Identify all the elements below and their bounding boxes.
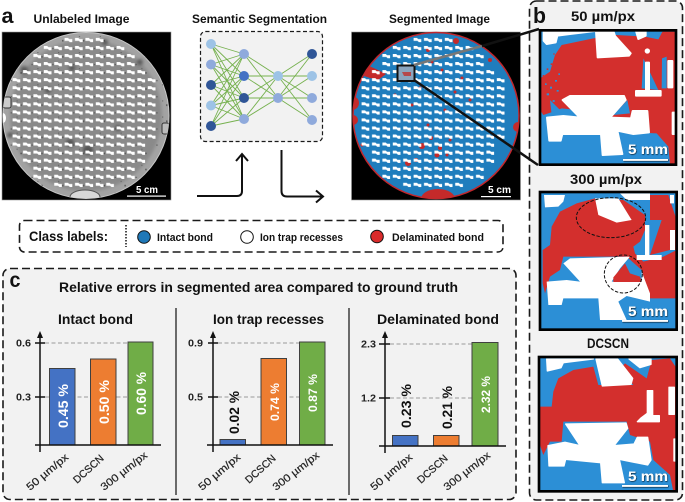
segmented wafer image xyxy=(345,32,523,209)
dashed circles of interest xyxy=(576,198,646,293)
panel b background xyxy=(530,1,682,500)
chart: ion trap recesses: 0.9 xyxy=(188,338,203,350)
bars xyxy=(392,342,498,446)
chart heading: Delaminated bond xyxy=(377,312,499,327)
chart: delaminated bond: 50 µm/px xyxy=(368,451,416,493)
image crop: DCSCN xyxy=(539,357,677,492)
scale bar: 50 um/px 5 mm xyxy=(623,142,668,161)
arrow: out of network xyxy=(282,150,323,202)
legend: intact bond xyxy=(138,231,213,244)
chart: ion trap recesses: DCSCN xyxy=(243,453,279,486)
panel label b: b xyxy=(533,3,546,28)
chart: delaminated bond: 0.23 % xyxy=(398,383,414,428)
chart: intact bond xyxy=(16,312,161,493)
heading: Semantic Segmentation: Semantic Segmentation xyxy=(192,12,327,26)
chart heading: Ion trap recesses xyxy=(213,312,324,327)
legend: delaminated bond xyxy=(371,230,484,244)
bars xyxy=(220,342,325,445)
scale bar: 300 um/px 5 mm: 5 mm xyxy=(628,304,668,319)
legend: intact bond: Intact bond xyxy=(157,232,213,244)
legend: delaminated bond: Delaminated bond xyxy=(392,232,484,244)
chart: ion trap recesses xyxy=(188,312,333,493)
chart: delaminated bond xyxy=(361,312,506,493)
scale bar: left 5 cm: 5 cm xyxy=(136,184,158,196)
chart: ion trap recesses: 50 µm/px xyxy=(196,451,244,493)
chart heading: Intact bond xyxy=(58,312,133,327)
heading: DCSCN: DCSCN xyxy=(587,336,629,351)
chart: ion trap recesses: 0.87 % xyxy=(306,374,320,412)
chart: ion trap recesses: 300 µm/px xyxy=(270,449,323,493)
heading: 300 um/px: 300 µm/px xyxy=(570,172,643,187)
scale bar: 50 um/px 5 mm: 5 mm xyxy=(628,142,668,157)
chart: delaminated bond: 0.21 % xyxy=(439,385,455,429)
chart: intact bond: 300 µm/px xyxy=(98,449,151,493)
chart: delaminated bond: 2.32 % xyxy=(479,376,493,413)
chart: ion trap recesses: 0.5 xyxy=(188,392,203,404)
image crop: 300 um/px xyxy=(540,192,677,330)
scale bar: DCSCN 5 mm: 5 mm xyxy=(628,469,668,484)
bars xyxy=(50,342,153,445)
chart: intact bond: 0.45 % xyxy=(55,383,71,428)
heading: Unlabeled Image: Unlabeled Image xyxy=(34,12,130,26)
chart: delaminated bond: DCSCN xyxy=(415,453,451,486)
chart: intact bond: 0.50 % xyxy=(96,379,112,424)
chart: intact bond: DCSCN xyxy=(71,453,107,486)
chart: intact bond: 0.60 % xyxy=(133,371,149,415)
legend title: Class labels: xyxy=(29,229,108,244)
legend: ion trap recesses: Ion trap recesses xyxy=(260,232,343,244)
network connections xyxy=(211,44,312,126)
chart title: Relative errors in segmented area compared to ground truth xyxy=(59,280,458,295)
heading: 50 um/px: 50 µm/px xyxy=(571,9,636,24)
region of interest square xyxy=(398,66,414,81)
chart: intact bond: 0.3 xyxy=(16,392,31,404)
chart: intact bond: 0.6 xyxy=(16,338,31,350)
chart: ion trap recesses: 0.74 % xyxy=(268,383,282,421)
panel label c: c xyxy=(10,269,21,292)
network nodes xyxy=(206,39,317,131)
heading: Segmented Image: Segmented Image xyxy=(389,12,490,26)
chart: ion trap recesses: 0.02 % xyxy=(226,390,242,434)
chart: intact bond: 50 µm/px xyxy=(24,451,72,493)
chart: delaminated bond: 2.3 xyxy=(361,340,376,350)
arrow: into network xyxy=(197,154,248,196)
network panel xyxy=(200,32,322,142)
scale bar: right 5 cm: 5 cm xyxy=(488,184,511,196)
panel label a: a xyxy=(2,5,14,28)
legend: ion trap recesses xyxy=(241,231,343,244)
scale bar: DCSCN 5 mm xyxy=(622,469,668,487)
image crop: 50 um/px xyxy=(540,30,676,165)
panel c xyxy=(3,268,516,500)
scale bar: right 5 cm xyxy=(481,184,511,197)
chart: delaminated bond: 1.2 xyxy=(361,394,376,404)
scale bar: left 5 cm xyxy=(127,184,166,197)
scale bar: 300 um/px 5 mm xyxy=(622,304,668,322)
zoom connector lines xyxy=(414,29,539,165)
class labels legend xyxy=(20,220,503,252)
unlabeled wafer image xyxy=(0,32,171,204)
chart: delaminated bond: 300 µm/px xyxy=(441,449,494,493)
